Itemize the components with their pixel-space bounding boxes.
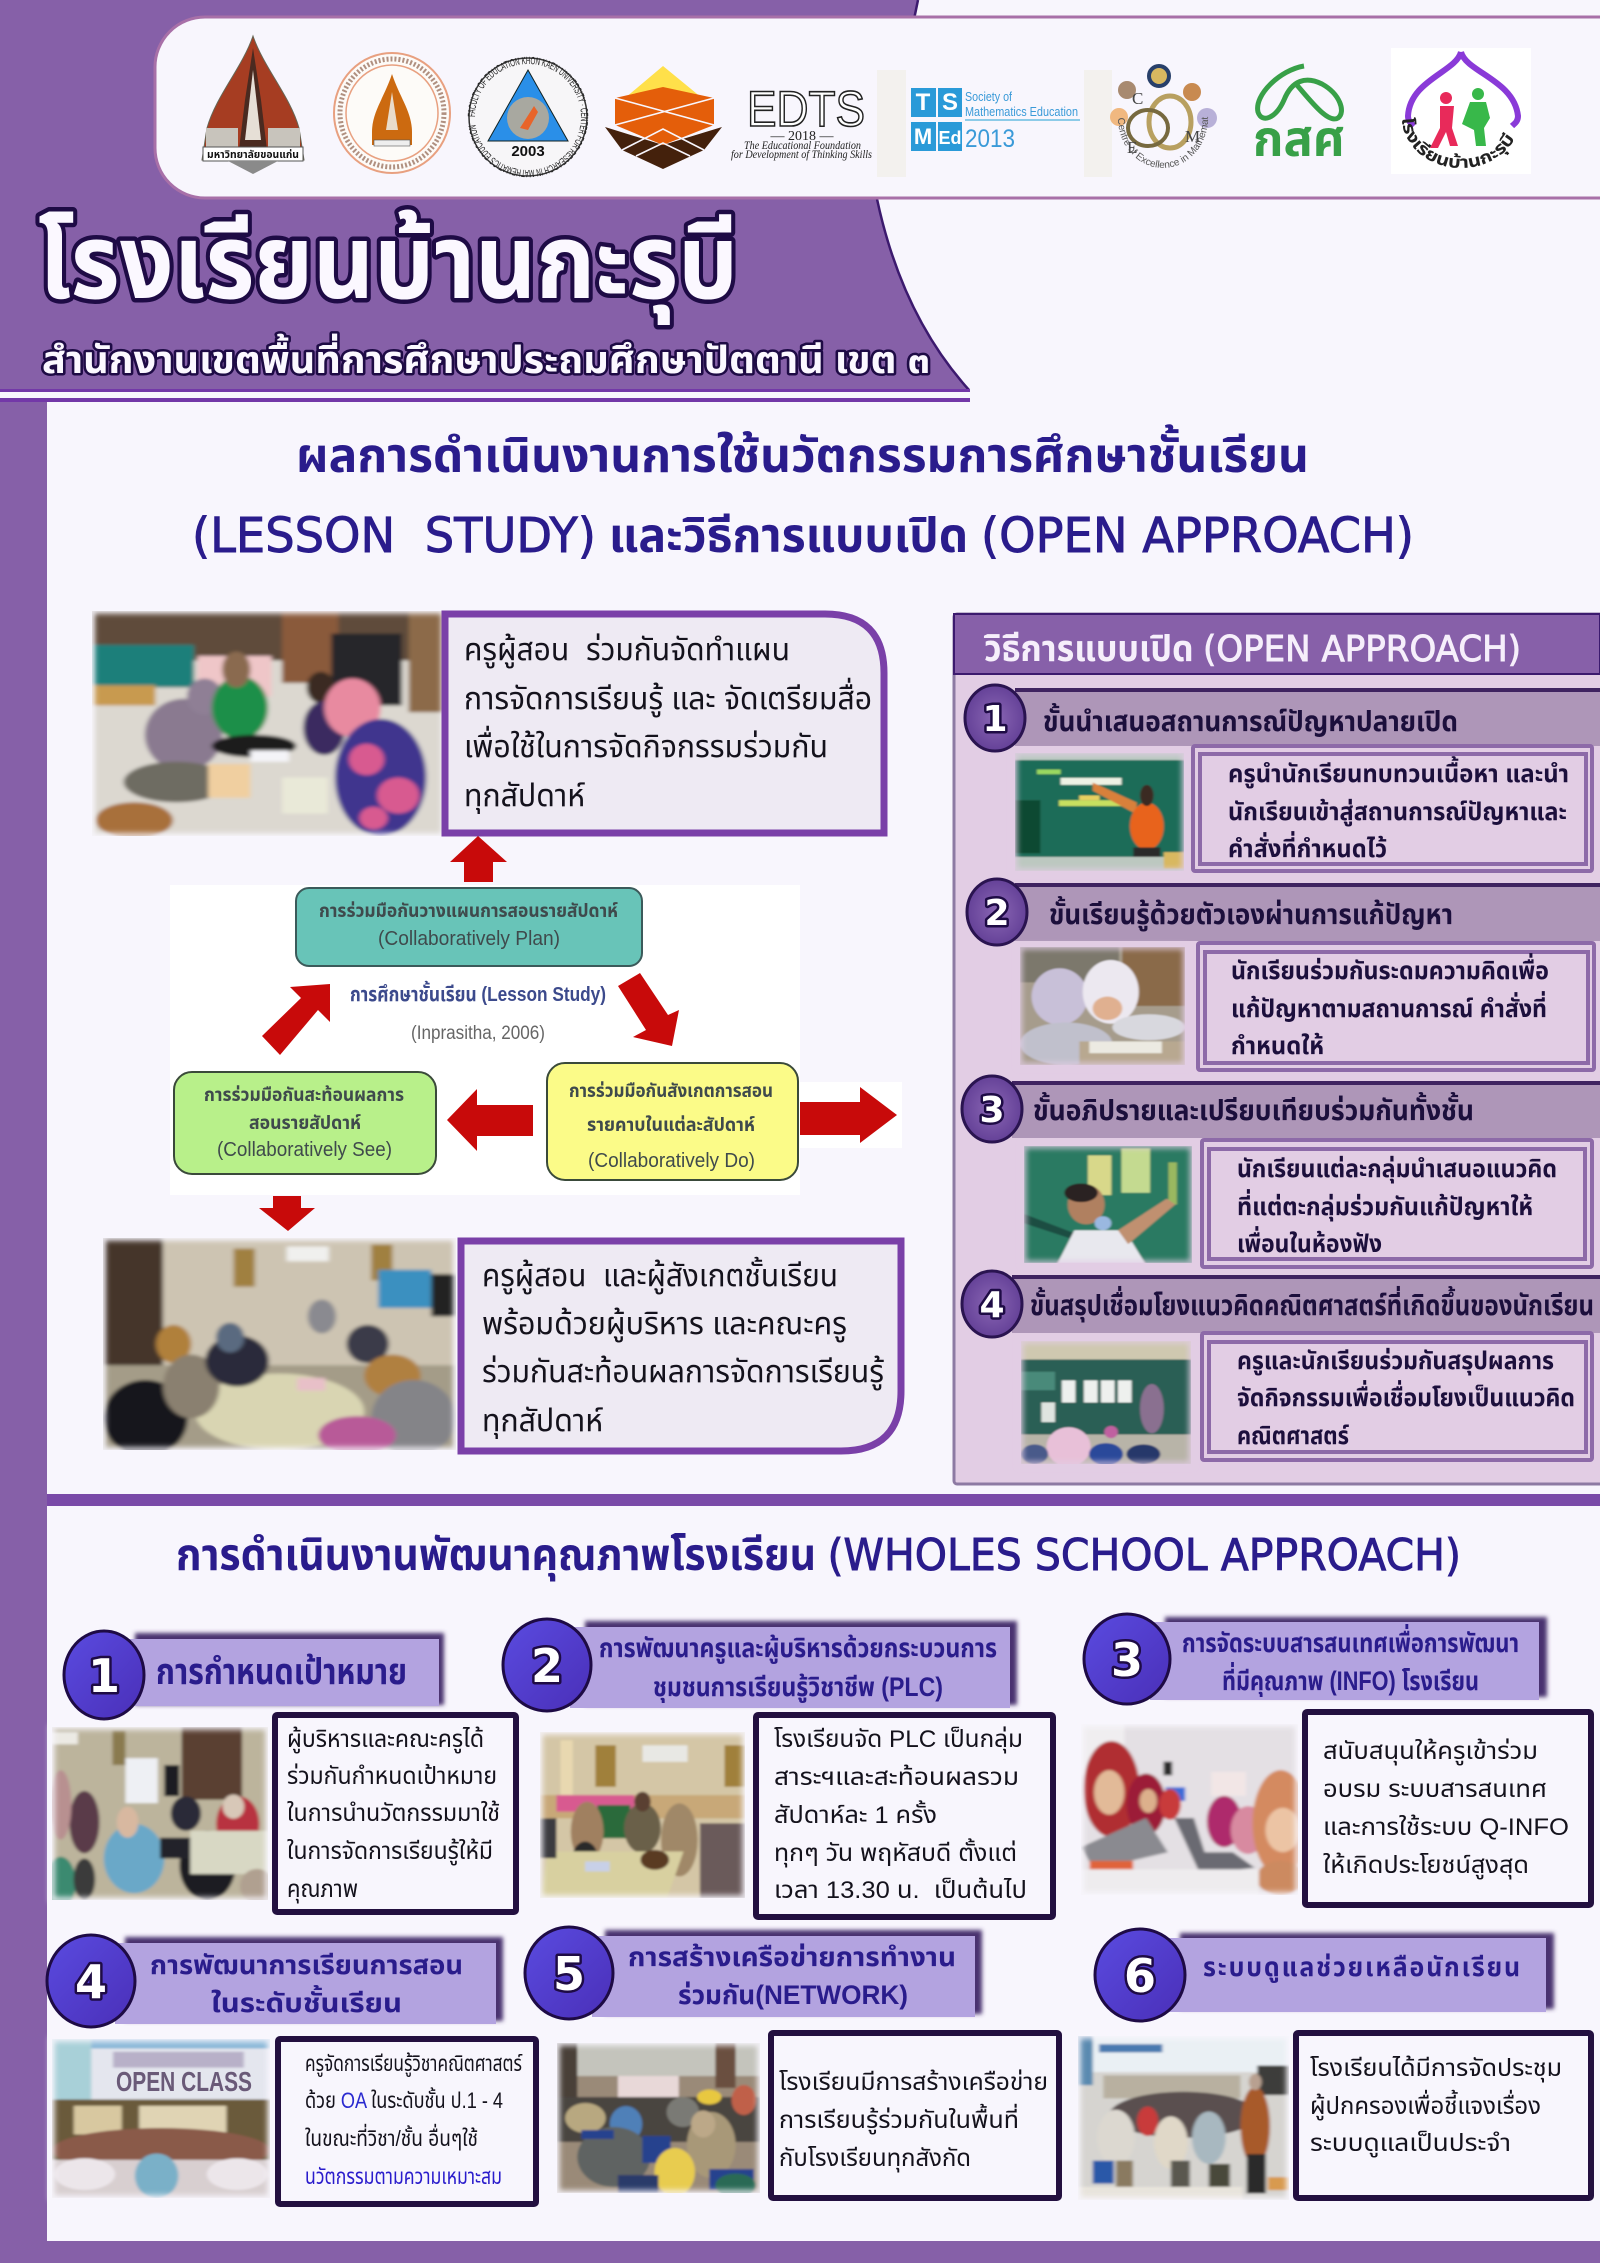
card 1: goal setting	[46, 1631, 516, 1912]
card 2 heading: ชุมชนการเรียนรู้วิชาชีพ (PLC)	[653, 1672, 943, 1703]
card 1 heading	[125, 1633, 444, 1706]
card 5 photo	[557, 2043, 760, 2198]
step 2 header bar	[1015, 883, 1600, 941]
logo: EEF green	[1253, 66, 1345, 167]
card 2 photo	[540, 1732, 745, 1898]
panel heading	[954, 614, 1600, 674]
card 2 text box	[756, 1715, 1053, 1917]
card 6 text box: โรงเรียนได้มีการจัดประชุม	[1310, 2055, 1562, 2083]
cycle box: do: (Collaboratively Do)	[588, 1150, 755, 1172]
card 3 number badge: 3	[1111, 1633, 1143, 1687]
logo: TSMEd: Ed	[938, 128, 962, 148]
card 2 heading	[570, 1621, 1017, 1708]
card 1 text box: ในการจัดการเรียนรู้ให้มี	[287, 1838, 493, 1866]
cycle box: plan: (Collaboratively Plan)	[378, 928, 560, 950]
card 1 text box: ผู้บริหารและคณะครูได้	[287, 1726, 484, 1754]
card 3 text box: สนับสนุนให้ครูเข้าร่วม	[1323, 1737, 1538, 1766]
step 1 header bar	[1015, 688, 1600, 746]
card 1 number badge: 1	[88, 1649, 120, 1703]
step 3 header bar	[1012, 1081, 1600, 1138]
card 4: classroom level	[47, 1935, 536, 2204]
card 1 heading: การกำหนดเป้าหมาย	[156, 1651, 407, 1692]
card 2 text box: ทุกๆ วัน พฤหัสบดี ตั้งแต่	[774, 1837, 1017, 1868]
card 3 text box	[1305, 1712, 1591, 1905]
arrow: down	[259, 1196, 315, 1231]
card 5 number badge: 5	[553, 1947, 585, 2001]
card 3 text box: ให้เกิดประโยชน์สูงสุด	[1323, 1852, 1529, 1880]
card 1 text box	[275, 1715, 516, 1912]
logo: Ban Karubi School: โรงเรียนบ้านกะรุบี	[1402, 117, 1513, 168]
logo: EDTS: — 2018 —	[770, 129, 834, 144]
cycle center label	[350, 981, 606, 1044]
logo: Khon Kaen University	[202, 36, 304, 174]
arrow: up	[450, 836, 507, 882]
card 3 heading	[1150, 1617, 1547, 1700]
card 1 number badge	[64, 1631, 144, 1719]
card 1 text box: คุณภาพ	[287, 1876, 358, 1904]
step 2 number badge: 2	[984, 893, 1010, 934]
photo: teachers planning on the floor	[92, 611, 444, 838]
card 3 heading: ที่มีคุณภาพ (INFO) โรงเรียน	[1222, 1662, 1479, 1697]
cycle box: do	[547, 1063, 798, 1180]
step 3 text box	[1202, 1140, 1592, 1267]
panel heading: วิธีการแบบเปิด (OPEN APPROACH)	[983, 628, 1521, 670]
cycle center label: การศึกษาชั้นเรียน (Lesson Study)	[350, 981, 606, 1006]
left side bar	[0, 402, 47, 2263]
step 2 text box: กำหนดให้	[1231, 1032, 1324, 1060]
logo: Center for Research in Mathematics Education: 2003	[511, 143, 545, 160]
card 4 photo: OPEN CLASS	[116, 2066, 252, 2097]
step 3 number badge: 3	[979, 1090, 1005, 1131]
card 1 photo	[46, 1727, 274, 1909]
card 4 text box: ครูจัดการเรียนรู้วิชาคณิตศาสตร์	[305, 2051, 523, 2077]
card 6 heading	[1165, 1933, 1554, 2012]
card 2: PLC	[503, 1619, 1053, 1917]
card 1 text box: ร่วมกันกำหนดเป้าหมาย	[287, 1762, 497, 1790]
card 5 heading	[592, 1930, 982, 2017]
logo: TSMEd: T	[916, 89, 931, 116]
callout: reflection text box: พร้อมด้วยผู้บริหาร และคณะครู	[482, 1306, 847, 1342]
card 2 text box: เวลา 13.30 น. เป็นต้นไป	[774, 1877, 1027, 1904]
photo: reflection meeting	[103, 1238, 456, 1456]
step 1 text box	[1193, 746, 1592, 871]
lesson study cycle diagram	[170, 885, 800, 1195]
logo: Ban Karubi School	[1391, 48, 1531, 174]
cycle box: see: สอนรายสัปดาห์	[249, 1113, 361, 1134]
arrow: down right	[618, 973, 679, 1046]
logo: TSMEd: M	[914, 124, 932, 149]
cycle box: see: (Collaboratively See)	[217, 1139, 392, 1161]
card 6 number badge: 6	[1124, 1949, 1156, 2003]
logo: TSMEd	[877, 70, 1112, 177]
callout: planning text box: ครูผู้สอน ร่วมกันจัดทำแผน	[464, 632, 790, 668]
logo: Centre of Excellence in Mathematics: M	[1185, 127, 1200, 146]
card 1 text box: ในการนำนวัตกรรมมาใช้	[287, 1800, 500, 1827]
panel: open approach	[954, 614, 1600, 1484]
card 4 heading: การพัฒนาการเรียนการสอน	[150, 1950, 463, 1980]
section heading: whole school approach: การดำเนินงานพัฒนาคุณภาพโรงเรียน (WHOLES SCHOOL APPROACH)	[176, 1530, 1461, 1582]
step 1 text box: ครูนำนักเรียนทบทวนเนื้อหา และนำ	[1228, 756, 1569, 789]
card 6 text box	[1296, 2033, 1591, 2198]
cycle box: see	[174, 1072, 436, 1174]
callout: reflection text box: ร่วมกันสะท้อนผลการจัดการเรียนรู้	[482, 1354, 884, 1390]
lesson study block	[92, 611, 902, 1456]
step 3 number badge	[962, 1076, 1022, 1142]
step 2 text box	[1198, 943, 1594, 1070]
cycle box: plan	[296, 888, 642, 966]
step 4 text box: ครูและนักเรียนร่วมกันสรุปผลการ	[1237, 1347, 1554, 1376]
card 6 heading: ระบบดูแลช่วยเหลือนักเรียน	[1203, 1952, 1522, 1983]
callout: planning text box: การจัดการเรียนรู้ และ จัดเตรียมสื่อ	[464, 677, 872, 717]
logo: institute seal	[334, 53, 450, 173]
logo: EEF green: กสศ	[1253, 111, 1345, 167]
callout: planning text box: ทุกสัปดาห์	[464, 778, 586, 814]
logo: TSMEd: 2013	[965, 125, 1015, 153]
step 2 text box: แก้ปัญหาตามสถานการณ์ คำสั่งที่	[1231, 991, 1547, 1023]
arrow: left	[447, 1089, 533, 1151]
logo: Center for Research in Mathematics Education: FACULTY OF EDUCATION KHON KAEN UNIVERSITY · CENTER FOR RESEARCH IN MATHEMATICS EDUCATION	[468, 56, 588, 178]
card 2 number badge	[503, 1619, 591, 1711]
logo: pine cone	[605, 66, 722, 169]
step 1 number badge: 1	[982, 699, 1008, 740]
step 1 text box: คำสั่งที่กำหนดไว้	[1228, 831, 1387, 863]
card 3 heading: การจัดระบบสารสนเทศเพื่อการพัฒนา	[1182, 1624, 1519, 1658]
card 3 photo	[1081, 1724, 1309, 1895]
step 2 number badge	[967, 879, 1027, 945]
cycle center label: (Inprasitha, 2006)	[411, 1023, 545, 1044]
logo: EDTS: The Educational Foundation	[744, 138, 861, 152]
logo: TSMEd: Society of	[965, 89, 1012, 104]
main title line 1: ผลการดำเนินงานการใช้นวัตกรรมการศึกษาชั้นเรียน	[296, 424, 1309, 483]
card 2 number badge: 2	[531, 1639, 563, 1693]
logo: Centre of Excellence in Mathematics: C	[1132, 89, 1143, 108]
card 4 heading	[115, 1937, 503, 2024]
header school name: โรงเรียนบ้านกะรุบี	[38, 205, 738, 325]
card 4 number badge	[47, 1935, 135, 2027]
callout: planning text box: เพื่อใช้ในการจัดกิจกรรมร่วมกัน	[464, 725, 828, 764]
step 1 text box: นักเรียนเข้าสู่สถานการณ์ปัญหาและ	[1228, 798, 1567, 827]
card 6 photo	[1078, 2036, 1289, 2200]
card 4 text box: ในขณะที่วิชา/ชั้น อื่นๆใช้	[305, 2123, 478, 2151]
card 3 text box: และการใช้ระบบ Q-INFO	[1323, 1814, 1569, 1841]
cycle box: do: รายคาบในแต่ละสัปดาห์	[587, 1114, 755, 1136]
card 4 text box	[278, 2039, 536, 2204]
logo: EDTS: EDTS	[747, 81, 865, 137]
step 3 text box: ที่แต่ตะกลุ่มร่วมกันแก้ปัญหาให้	[1237, 1189, 1533, 1222]
card 5 heading: ร่วมกัน(NETWORK)	[678, 1980, 908, 2010]
step 3 photo: boy at board	[1024, 1146, 1192, 1263]
cycle box: see: การร่วมมือกันสะท้อนผลการ	[204, 1084, 404, 1106]
step 2 photo: students writing	[1020, 947, 1185, 1065]
callout: reflection text box: ครูผู้สอน และผู้สังเกตชั้นเรียน	[482, 1256, 838, 1294]
card 5 text box: การเรียนรู้ร่วมกันในพื้นที่	[779, 2103, 1019, 2135]
header purple banner	[0, 0, 969, 390]
main title line 2: (LESSON STUDY) และวิธีการแบบเปิด (OPEN APPROACH)	[192, 508, 1414, 564]
arrow: right	[800, 1082, 902, 1148]
card 3 number badge	[1084, 1614, 1170, 1704]
card 6: student support	[1078, 1929, 1591, 2200]
card 4 text box: นวัตกรรมตามความเหมาะสม	[305, 2164, 502, 2189]
step 2 text box: นักเรียนร่วมกันระดมความคิดเพื่อ	[1231, 953, 1549, 985]
card 4 photo	[52, 2039, 270, 2198]
card 2 text box: โรงเรียนจัด PLC เป็นกลุ่ม	[774, 1725, 1023, 1754]
logo: Khon Kaen University: มหาวิทยาลัยขอนแก่น	[207, 148, 299, 161]
card 5 text box: กับโรงเรียนทุกสังกัด	[779, 2145, 971, 2173]
logo: EDTS: for Development of Thinking Skills	[731, 147, 872, 161]
card 3 text box: อบรม ระบบสารสนเทศ	[1323, 1776, 1547, 1803]
step 4 text box: จัดกิจกรรมเพื่อเชื่อมโยงเป็นแนวคิด	[1237, 1380, 1575, 1412]
step 3 header bar: ขั้นอภิปรายและเปรียบเทียบร่วมกันทั้งชั้น	[1033, 1091, 1474, 1126]
section divider band	[47, 1494, 1600, 1506]
step 1 photo: teacher at board	[1015, 753, 1184, 871]
logo strip	[154, 16, 1600, 200]
logo: TSMEd: Mathematics Education	[965, 104, 1078, 119]
step 2 header bar: ขั้นเรียนรู้ด้วยตัวเองผ่านการแก้ปัญหา	[1049, 895, 1453, 932]
callout: planning text box	[445, 614, 884, 833]
callout: reflection text box	[461, 1241, 901, 1451]
cycle box: plan: การร่วมมือกันวางแผนการสอนรายสัปดาห์	[319, 900, 618, 922]
card 6 text box: ผู้ปกครองเพื่อชี้แจงเรื่อง	[1310, 2089, 1541, 2121]
header subtitle: สำนักงานเขตพื้นที่การศึกษาประถมศึกษาปัตตานี เขต ๓	[42, 333, 930, 382]
cycle box: do: การร่วมมือกันสังเกตการสอน	[569, 1080, 773, 1102]
step 4 number badge	[962, 1271, 1022, 1337]
card 2 text box: สาระฯและสะท้อนผลรวม	[774, 1764, 1019, 1791]
card 5: network	[525, 1927, 1059, 2198]
card 4 heading: ในระดับชั้นเรียน	[211, 1985, 402, 2018]
card 3: information system	[1081, 1614, 1591, 1905]
step 3 text box: เพื่อนในห้องฟัง	[1237, 1226, 1382, 1258]
step 1	[965, 685, 1600, 871]
card 5 heading: การสร้างเครือข่ายการทำงาน	[628, 1942, 956, 1972]
card 6 text box: ระบบดูแลเป็นประจำ	[1310, 2130, 1511, 2158]
card 5 text box	[771, 2033, 1059, 2198]
step 4 header bar	[1012, 1275, 1600, 1333]
logo: Centre of Excellence in Mathematics	[1110, 64, 1217, 168]
card 5 text box: โรงเรียนมีการสร้างเครือข่าย	[779, 2068, 1048, 2096]
bottom band	[0, 2241, 1600, 2263]
step 3	[962, 1076, 1600, 1267]
logo: TSMEd: S	[942, 89, 958, 116]
card 2 heading: การพัฒนาครูและผู้บริหารด้วยกระบวนการ	[599, 1633, 997, 1664]
card 6 number badge	[1095, 1929, 1185, 2021]
card 2 text box: สัปดาห์ละ 1 ครั้ง	[774, 1799, 937, 1829]
card 4 text box: ด้วย OA ในระดับชั้น ป.1 - 4	[305, 2086, 503, 2113]
card 4 number badge: 4	[75, 1955, 107, 2009]
step 3 text box: นักเรียนแต่ละกลุ่มนำเสนอแนวคิด	[1237, 1155, 1557, 1184]
card 5 number badge	[525, 1927, 613, 2019]
step 2	[967, 879, 1600, 1070]
step 4 text box: คณิตศาสตร์	[1237, 1422, 1349, 1450]
logo: Centre of Excellence in Mathematics: E	[1127, 138, 1137, 157]
step 4 number badge: 4	[979, 1285, 1005, 1326]
arrow: up right	[262, 984, 330, 1055]
logo: EDTS	[731, 81, 872, 161]
step 1 header bar: ขั้นนำเสนอสถานการณ์ปัญหาปลายเปิด	[1043, 702, 1458, 737]
step 4	[962, 1271, 1600, 1466]
step 4 text box	[1202, 1333, 1592, 1460]
step 1 number badge	[965, 685, 1025, 751]
step 4 photo: classroom summary	[1021, 1341, 1191, 1466]
callout: reflection text box: ทุกสัปดาห์	[482, 1403, 604, 1439]
